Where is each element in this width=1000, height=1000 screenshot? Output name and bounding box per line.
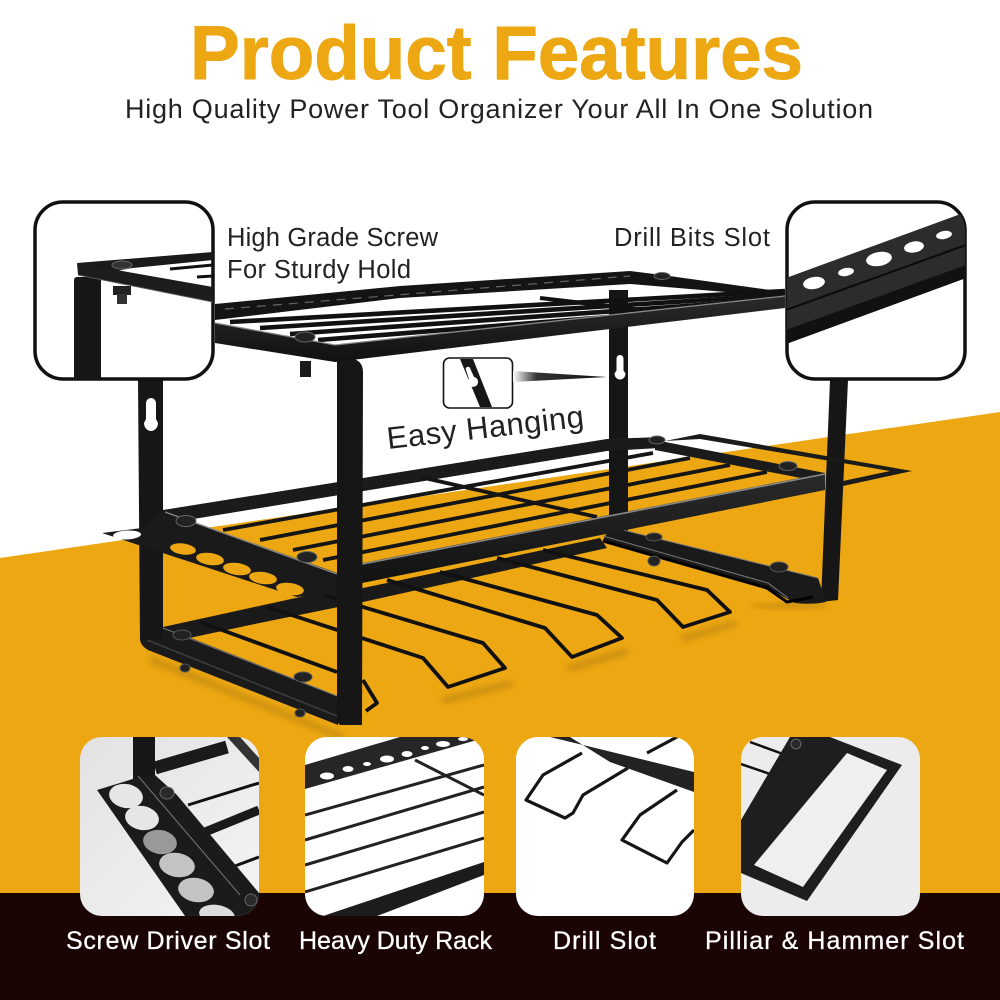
title: Product Features [190,11,803,96]
post [74,277,101,382]
callout: drill bits detail [786,202,966,379]
top fasteners [295,272,670,377]
arrow: pointer to keyhole [513,371,607,382]
subtitle: High Quality Power Tool Organizer Your All In One Solution [125,94,873,124]
bottom fasteners [173,533,788,717]
tool holder plate [102,511,340,597]
dark footer band [0,893,1000,1000]
callout label: high grade screw [227,224,439,284]
icon: keyhole hanging [444,358,512,408]
plate holes [113,530,305,597]
top shelf [215,271,785,377]
keyhole slots [144,355,626,431]
rear middle rail [163,437,660,524]
callout label: drill bits slot: Drill Bits Slot [614,224,770,252]
panel labels: Pilliar & Hammer Slot [705,927,964,955]
drill prongs [200,550,730,711]
screw [112,261,132,269]
rear uprights [138,290,848,640]
middle rail front [337,473,825,588]
front rail [77,263,213,302]
slats middle [223,453,767,560]
bottom tier [140,530,826,725]
panel labels: Heavy Duty Rack [299,927,492,955]
panel: screw driver slot [80,737,259,928]
callout: screw detail [35,202,213,382]
callout label: high grade screw: High Grade Screw [227,224,439,252]
panel: drill slot [516,737,694,916]
foot rail right [603,530,826,604]
panel labels: Drill Slot [553,927,656,955]
middle fasteners [176,436,797,562]
foot rail left [140,627,338,725]
panel labels: Screw Driver Slot [66,927,270,955]
rack illustration [102,271,912,740]
callout label: high grade screw: For Sturdy Hold [227,256,411,284]
panel labels [66,927,964,955]
front upright [337,358,363,725]
yellow diagonal backdrop [0,412,1000,900]
wire tab right [665,434,912,486]
middle rail right side [655,440,825,482]
back rail [77,252,213,272]
panel: pilliar and hammer slot [741,737,920,916]
panel: heavy duty rack [305,737,484,916]
middle tier [102,434,912,597]
rear bottom rail [163,538,607,640]
easy hanging label: Easy Hanging [385,399,586,456]
cast shadows [150,603,830,740]
